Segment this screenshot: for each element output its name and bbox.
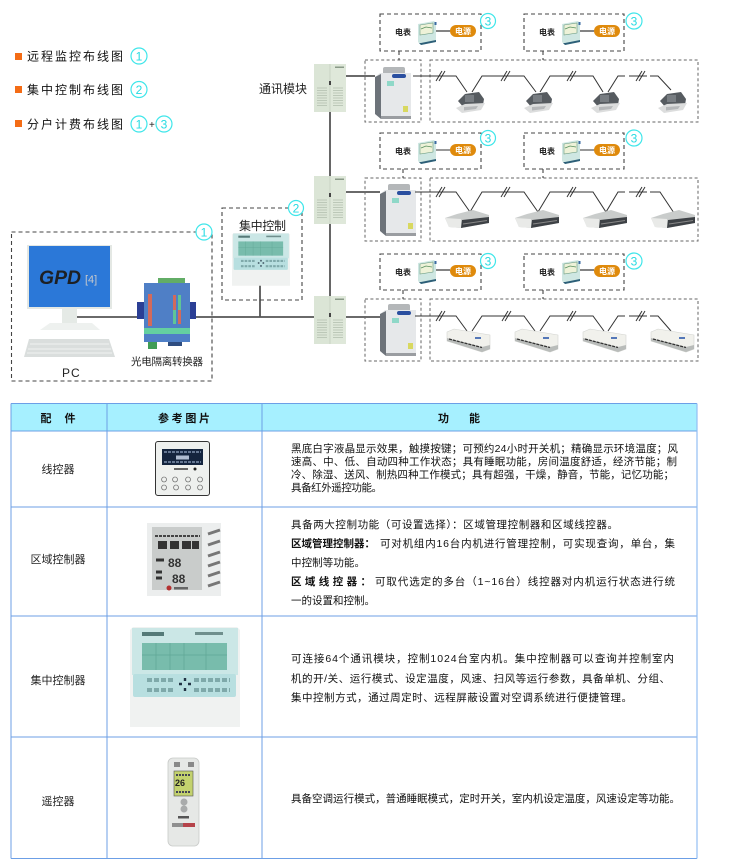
icon: opto-isolated converter bbox=[137, 278, 196, 349]
icon: central controller bbox=[130, 627, 240, 727]
icon: ducted unit 1 bbox=[445, 210, 489, 228]
legend item: centralized control wiring bbox=[15, 82, 147, 98]
row: central controller: 集中控制器 bbox=[30, 673, 86, 687]
row: wired controller bbox=[42, 442, 678, 496]
icon: ducted unit 4 bbox=[651, 210, 695, 228]
row: remote controller: 遥控器 bbox=[42, 794, 74, 808]
icon: PC bbox=[24, 245, 115, 357]
description: 可对机组内16台内机进行管理控制，可实现查询，单台，集 bbox=[380, 537, 676, 550]
meter group: row 2 right: 3 bbox=[631, 132, 638, 146]
icon: remote controller: 26 bbox=[175, 778, 185, 788]
icon: PC: [4] bbox=[85, 274, 97, 286]
communication module 3 bbox=[314, 296, 346, 344]
panel: row 1 outdoor unit bbox=[365, 60, 421, 122]
table header bbox=[11, 404, 697, 431]
meter group: row 1 left: 电表 bbox=[395, 27, 411, 37]
icon: zone controller: 88 bbox=[168, 556, 182, 570]
communication module 2 bbox=[314, 176, 346, 224]
icon: PC: GPD bbox=[39, 268, 81, 289]
label: communication module: 通讯模块 bbox=[259, 82, 307, 96]
icon: cassette unit 3 bbox=[591, 92, 620, 113]
icon: wall unit 4 bbox=[651, 329, 694, 352]
icon: outdoor unit bbox=[375, 67, 411, 119]
meter group: row 3 right: 3 bbox=[631, 254, 638, 268]
meter group: row 1 left: 3 bbox=[485, 14, 492, 28]
panel: remote monitoring PC group bbox=[12, 224, 212, 381]
row: zone controller bbox=[30, 518, 676, 607]
icon: ducted unit 2 bbox=[515, 210, 559, 228]
meter group: row 2 right: 电表 bbox=[539, 146, 555, 156]
label: centralized control: 集中控制 bbox=[239, 218, 286, 233]
description: 冷、除湿、送风、制热四种工作模式；具有超强，干燥，静音，节能，记忆功能； bbox=[291, 468, 674, 481]
legend item: per-household billing wiring: 3 bbox=[161, 118, 168, 132]
description: 中控制等功能。 bbox=[291, 556, 365, 569]
meter group: row 1 left bbox=[380, 14, 496, 60]
meter group: row 3 left: 3 bbox=[485, 254, 492, 268]
icon: centralized controller bbox=[232, 233, 290, 286]
icon: wall unit 2 bbox=[515, 329, 558, 352]
wire: row 2 indoor bus bbox=[415, 187, 674, 213]
description: 集中控制方式，通过周定时、远程屏蔽设置对空调系统进行便捷管理。 bbox=[291, 691, 632, 704]
description: 可连接64个通讯模块，控制1024台室内机。集中控制器可以查询并控制室内 bbox=[291, 652, 674, 665]
row: zone controller: 区域控制器 bbox=[30, 552, 86, 566]
table: accessories bbox=[11, 404, 697, 858]
meter group: row 2 left bbox=[380, 130, 496, 178]
icon: outdoor unit bbox=[380, 184, 416, 236]
legend item: per-household billing wiring: 分户计费布线图 bbox=[27, 116, 123, 132]
legend item: per-household billing wiring: + bbox=[149, 120, 155, 131]
wiring lines bbox=[77, 76, 380, 317]
meter group: row 3 right: 电源 bbox=[599, 266, 615, 276]
legend item: per-household billing wiring bbox=[15, 116, 172, 132]
row: central controller bbox=[30, 627, 674, 727]
meter group: row 1 left: 电源 bbox=[455, 26, 471, 36]
icon: cassette unit 2 bbox=[524, 92, 553, 113]
meter group: row 2 left: 电源 bbox=[455, 145, 471, 155]
label: PC: PC bbox=[62, 366, 81, 380]
icon: outdoor unit bbox=[380, 304, 416, 356]
description: 具备空调运行模式，普通睡眠模式，定时开关，室内机设定温度，风速设定等功能。 bbox=[291, 792, 680, 805]
legend item: centralized control wiring: 集中控制布线图 bbox=[27, 82, 123, 97]
description: 具备红外遥控功能。 bbox=[291, 481, 382, 494]
description: 机的开/关、运行模式、设定温度，风速、扫风等运行参数，具备单机、分组、 bbox=[291, 672, 670, 685]
panel: row 3 outdoor unit bbox=[365, 299, 421, 361]
meter group: row 3 right bbox=[524, 253, 642, 299]
icon: cassette unit 1 bbox=[456, 92, 485, 113]
legend item: remote monitoring wiring: 远程监控布线图 bbox=[27, 48, 123, 64]
table header: 参考图片 bbox=[158, 411, 210, 425]
description bbox=[291, 652, 674, 704]
meter group: row 3 left: 电源 bbox=[455, 266, 471, 276]
legend item: remote monitoring wiring: 1 bbox=[136, 50, 143, 64]
meter group: row 2 right bbox=[524, 130, 642, 178]
badge 2: 2 bbox=[293, 202, 300, 216]
meter group: row 3 left: 电表 bbox=[395, 267, 411, 277]
description: 区域管理控制器： bbox=[291, 537, 375, 550]
icon: ducted unit 3 bbox=[583, 210, 627, 228]
legend bbox=[15, 48, 172, 132]
table header: 配 件 bbox=[40, 411, 76, 425]
wire: row 1 indoor bus bbox=[413, 71, 671, 92]
legend item: remote monitoring wiring bbox=[15, 48, 147, 64]
icon: zone controller: 88 bbox=[172, 572, 186, 586]
badge 1: 1 bbox=[201, 226, 208, 240]
label: converter: 光电隔离转换器 bbox=[131, 355, 204, 368]
panel: row 3 indoor wall units bbox=[415, 299, 698, 361]
icon: zone controller bbox=[147, 523, 221, 596]
row: wired controller: 线控器 bbox=[42, 462, 74, 476]
communication module 1 bbox=[314, 64, 346, 112]
table header: 功 能 bbox=[438, 411, 480, 425]
icon: wall unit 1 bbox=[447, 329, 490, 352]
meter group: row 3 right: 电表 bbox=[539, 267, 555, 277]
meter group: row 2 left: 电表 bbox=[395, 146, 411, 156]
meter group: row 1 right: 电源 bbox=[599, 26, 615, 36]
description: 区域线控器： bbox=[291, 575, 371, 588]
meter group: row 1 right: 电表 bbox=[539, 27, 555, 37]
icon: wired controller bbox=[156, 442, 210, 496]
panel: row 1 indoor cassette units bbox=[413, 60, 698, 122]
icon: remote controller bbox=[168, 758, 199, 846]
meter group: row 3 left bbox=[380, 254, 496, 299]
meter group: row 1 right bbox=[524, 13, 642, 60]
description bbox=[291, 442, 678, 494]
description: 速高、中、低、自动四种工作状态；具有睡眠功能，房间温度舒适，经济节能；制 bbox=[291, 455, 677, 468]
icon: cassette unit 4 bbox=[658, 92, 687, 113]
meter group: row 2 right: 电源 bbox=[599, 145, 615, 155]
legend item: centralized control wiring: 2 bbox=[136, 83, 143, 97]
description: 可取代选定的多台（1~16台）线控器对内机运行状态进行统 bbox=[375, 575, 676, 588]
panel: row 2 indoor ducted units bbox=[415, 178, 698, 241]
row: remote controller bbox=[42, 758, 680, 846]
description: 一的设置和控制。 bbox=[291, 594, 375, 607]
wire: row 3 indoor bus bbox=[415, 311, 671, 331]
description: 黑底白字液晶显示效果，触摸按键；可预约24小时开关机；精确显示环境温度；风 bbox=[291, 442, 678, 455]
description: 具备两大控制功能（可设置选择）：区域管理控制器和区域线控器。 bbox=[291, 518, 618, 531]
icon: wall unit 3 bbox=[583, 329, 626, 352]
meter group: row 2 left: 3 bbox=[485, 132, 492, 146]
panel: centralized control group bbox=[222, 200, 304, 300]
panel: row 2 outdoor unit bbox=[365, 178, 421, 241]
description bbox=[291, 518, 676, 607]
meter group: row 1 right: 3 bbox=[631, 14, 638, 28]
badge 1 bbox=[196, 224, 212, 240]
legend item: per-household billing wiring: 1 bbox=[136, 118, 143, 132]
